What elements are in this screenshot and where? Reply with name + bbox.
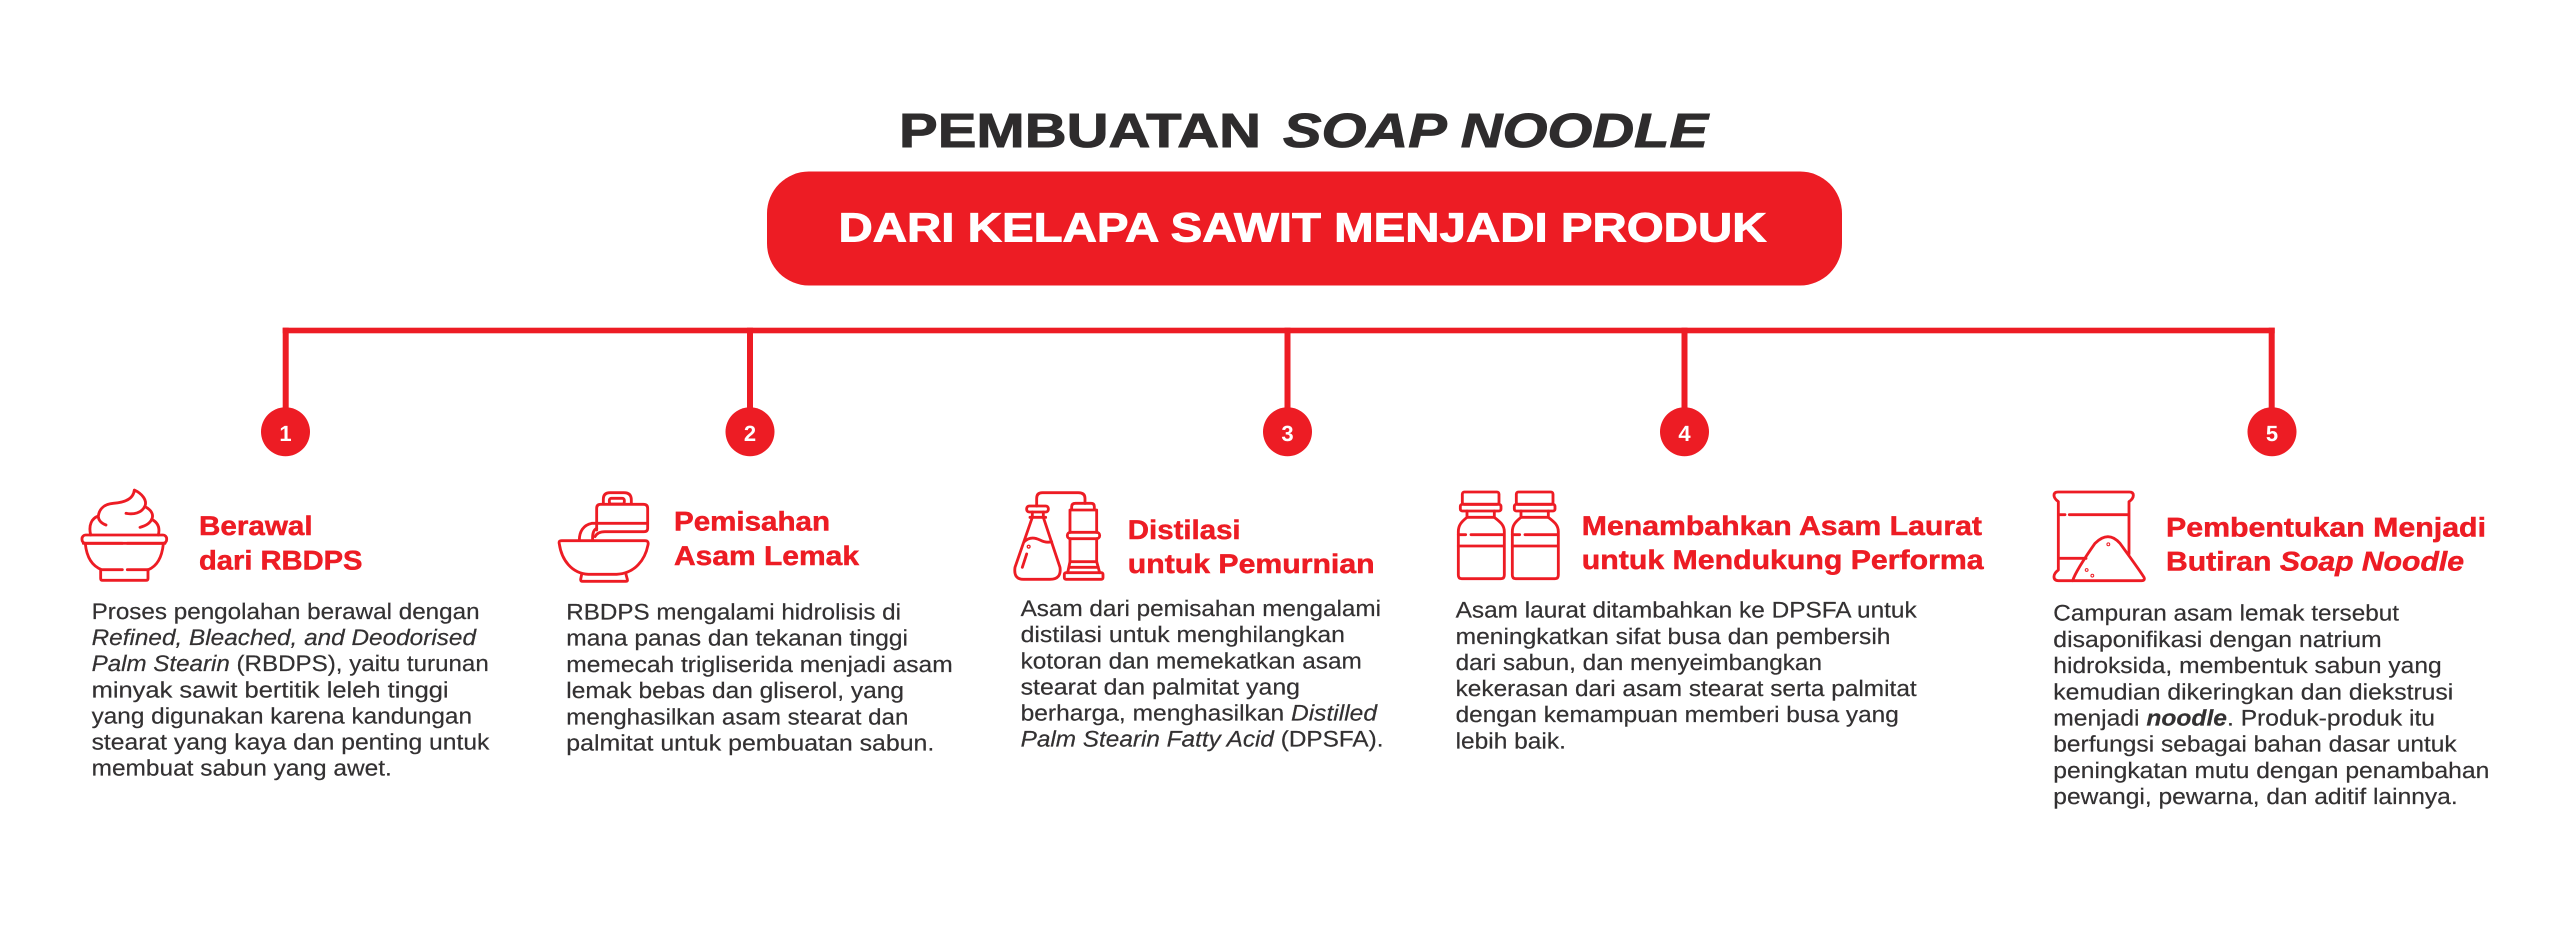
body text: dengan kemampuan memberi busa yang	[1456, 702, 1899, 727]
body text: RBDPS mengalami hidrolisis di	[566, 599, 901, 624]
banner: dari kelapa sawit menjadi produk	[767, 172, 1842, 286]
body text: berfungsi sebagai bahan dasar untuk	[2053, 732, 2458, 757]
icon: bowl of cream	[82, 490, 167, 580]
icon: bowl and pouring bag	[559, 493, 648, 581]
banner: dari kelapa sawit menjadi produk: DARI KELAPA SAWIT MENJADI PRODUK	[838, 205, 1767, 251]
body text	[2053, 601, 2489, 809]
body text: yang digunakan karena kandungan	[92, 703, 472, 728]
heading: untuk Mendukung Performa	[1582, 545, 1985, 575]
heading	[1128, 515, 1375, 579]
panel: step 3	[1015, 493, 1384, 752]
body text: berharga, menghasilkan Distilled	[1021, 701, 1379, 726]
step number 3	[1263, 407, 1312, 456]
body text: lemak bebas dan gliserol, yang	[566, 678, 904, 703]
panel: step 4	[1456, 492, 1985, 753]
step number 2	[726, 407, 774, 456]
heading: Butiran Soap Noodle	[2166, 547, 2464, 577]
body text: stearat yang kaya dan penting untuk	[92, 730, 490, 754]
body text: disaponifikasi dengan natrium	[2053, 627, 2382, 652]
panel: step 5	[2053, 492, 2489, 809]
icon: distillation flask	[1015, 493, 1103, 579]
body text: kekerasan dari asam stearat serta palmitat	[1456, 676, 1918, 701]
step number 5: 5	[2266, 421, 2278, 446]
step number 1	[261, 407, 310, 456]
body text: mana panas dan tekanan tinggi	[566, 626, 908, 651]
body text	[1021, 596, 1384, 752]
body text: palmitat untuk pembuatan sabun.	[566, 731, 934, 756]
icon: sack and powder pile	[2054, 492, 2144, 581]
body text: menjadi noodle . Produk-produk itu	[2053, 706, 2435, 730]
body text: stearat dan palmitat yang	[1021, 674, 1300, 699]
title: PEMBUATAN	[899, 105, 1261, 158]
body text: memecah trigliserida menjadi asam	[566, 652, 953, 677]
heading	[2166, 513, 2486, 577]
heading: Distilasi	[1128, 515, 1241, 545]
heading: Pembentukan Menjadi	[2166, 513, 2486, 543]
heading	[199, 511, 362, 575]
body text: lebih baik.	[1456, 728, 1566, 753]
body text	[92, 599, 490, 781]
body text: distilasi untuk menghilangkan	[1021, 622, 1345, 647]
panel: step 2	[559, 493, 953, 756]
heading: Pemisahan	[674, 507, 830, 537]
body text: Campuran asam lemak tersebut	[2053, 601, 2400, 626]
body text: minyak sawit bertitik leleh tinggi	[92, 677, 449, 702]
step number 2: 2	[744, 421, 756, 446]
icon: two bottles	[1458, 492, 1558, 579]
body text: pewangi, pewarna, dan aditif lainnya.	[2053, 784, 2458, 809]
body text: Asam dari pemisahan mengalami	[1021, 596, 1381, 621]
heading: Asam Lemak	[674, 541, 860, 571]
step number 5	[2248, 407, 2296, 456]
title: SOAP NOODLE	[1283, 105, 1710, 158]
heading: untuk Pemurnian	[1128, 549, 1375, 579]
body text: kotoran dan memekatkan asam	[1021, 648, 1362, 673]
body text: hidroksida, membentuk sabun yang	[2053, 653, 2442, 678]
connector lines	[283, 328, 2275, 413]
body text: Proses pengolahan berawal dengan	[92, 599, 480, 624]
body text: Palm Stearin (RBDPS), yaitu turunan	[92, 651, 489, 676]
heading	[1582, 511, 1985, 575]
step number 4	[1660, 407, 1709, 456]
step number 3: 3	[1281, 421, 1294, 446]
body text: Palm Stearin Fatty Acid (DPSFA).	[1021, 727, 1384, 752]
body text: dari sabun, dan menyeimbangkan	[1456, 650, 1822, 675]
body text: menghasilkan asam stearat dan	[566, 704, 908, 729]
title	[899, 105, 1710, 158]
body text: Refined, Bleached, and Deodorised	[92, 625, 478, 650]
body text	[1456, 598, 1918, 753]
panel: step 1	[82, 490, 490, 781]
step number 1: 1	[279, 421, 292, 446]
body text: membuat sabun yang awet.	[92, 756, 392, 781]
step number 4: 4	[1678, 421, 1691, 446]
body text: peningkatan mutu dengan penambahan	[2053, 758, 2489, 783]
body text: kemudian dikeringkan dan diekstrusi	[2053, 679, 2453, 704]
body text	[566, 599, 953, 756]
heading: Berawal	[199, 511, 313, 541]
body text: meningkatkan sifat busa dan pembersih	[1456, 624, 1890, 649]
heading	[674, 507, 860, 571]
heading: Menambahkan Asam Laurat	[1582, 511, 1982, 541]
body text: Asam laurat ditambahkan ke DPSFA untuk	[1456, 598, 1918, 623]
heading: dari RBDPS	[199, 545, 362, 575]
